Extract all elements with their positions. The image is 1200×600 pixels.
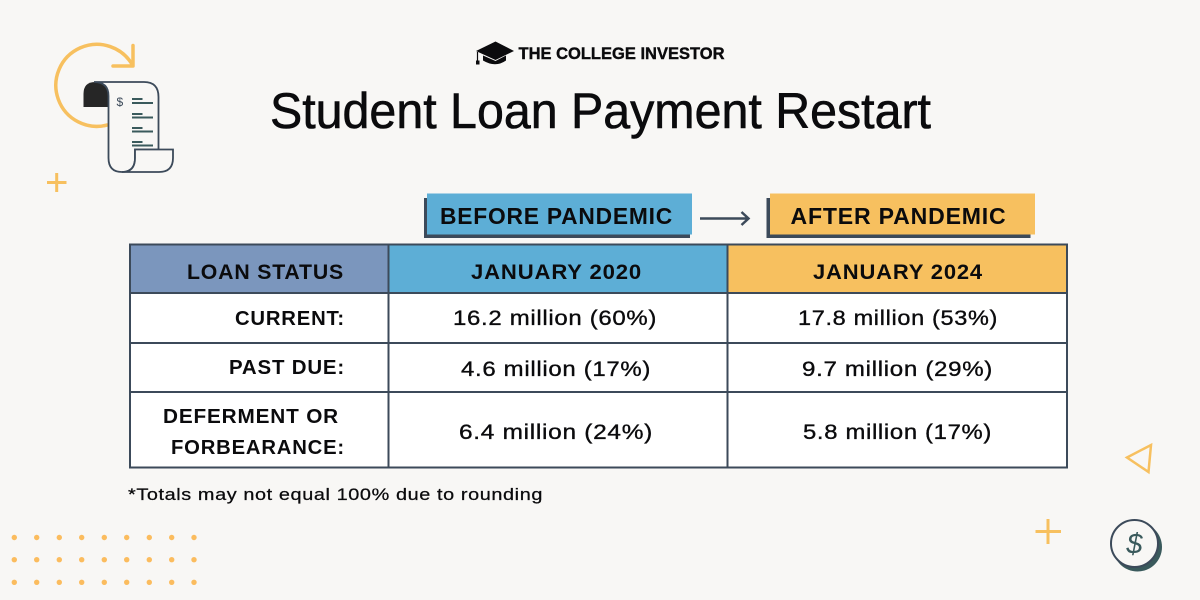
logo: The College Investor: THE COLLEGE INVESTOR bbox=[518, 45, 725, 63]
row: deferment or forbearance bbox=[163, 406, 992, 459]
table header row: LOAN STATUS bbox=[187, 261, 344, 284]
row: current: CURRENT: bbox=[235, 308, 345, 330]
badge: before pandemic: BEFORE PANDEMIC bbox=[440, 203, 673, 229]
row: current bbox=[235, 307, 998, 330]
icon: payment receipt with restart arrow bbox=[56, 44, 173, 172]
arrow bbox=[700, 212, 748, 225]
logo: The College Investor bbox=[476, 42, 725, 64]
row: deferment or forbearance: DEFERMENT OR bbox=[163, 406, 339, 428]
table body bbox=[130, 293, 1067, 468]
icon: dollar coin bbox=[1111, 520, 1162, 572]
icon: payment receipt with restart arrow: $ bbox=[116, 95, 124, 109]
badge: before pandemic bbox=[424, 194, 692, 238]
footnote: *Totals may not equal 100% due to rounding bbox=[128, 486, 543, 504]
row: deferment or forbearance: 6.4 million (24%) bbox=[459, 421, 653, 444]
table header row: JANUARY 2024 bbox=[813, 261, 983, 284]
icon: dollar coin: $ bbox=[1125, 528, 1143, 560]
badge: after pandemic: AFTER PANDEMIC bbox=[790, 203, 1006, 229]
icon: graduation cap bbox=[476, 42, 514, 64]
row: past due: 9.7 million (29%) bbox=[802, 358, 993, 381]
row: current: 17.8 million (53%) bbox=[798, 307, 998, 330]
decorative dot grid bbox=[12, 535, 197, 585]
table header row: JANUARY 2020 bbox=[471, 261, 642, 284]
icon: small plus top left bbox=[47, 173, 66, 192]
table bbox=[130, 244, 1067, 468]
table header row bbox=[130, 245, 1067, 293]
row: past due: PAST DUE: bbox=[229, 357, 345, 379]
icon: triangle outline bbox=[1127, 445, 1151, 472]
icon: small plus bottom right bbox=[1036, 519, 1061, 544]
row: past due bbox=[229, 357, 993, 381]
row: current: 16.2 million (60%) bbox=[453, 307, 657, 330]
row: past due: 4.6 million (17%) bbox=[461, 358, 651, 381]
badge: after pandemic bbox=[766, 194, 1035, 238]
row: deferment or forbearance: FORBEARANCE: bbox=[171, 437, 345, 459]
row: deferment or forbearance: 5.8 million (17%) bbox=[803, 421, 992, 444]
title: Student Loan Payment Restart bbox=[270, 83, 931, 139]
